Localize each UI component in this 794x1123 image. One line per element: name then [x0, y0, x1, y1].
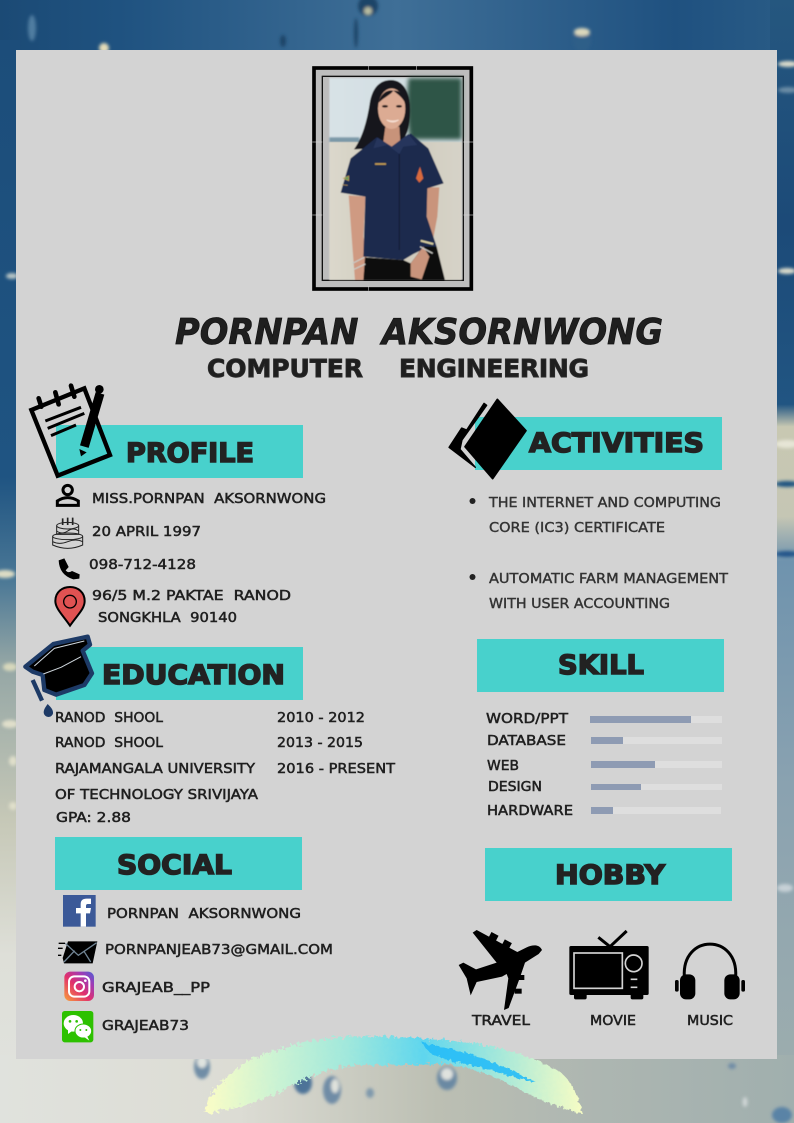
- facebook text: PORNPAN AKSORNWONG: [107, 906, 301, 922]
- education rows: OF TECHNOLOGY SRIVIJAYA: [55, 787, 259, 803]
- panel: social: [55, 837, 333, 1042]
- activity 2: [470, 571, 729, 612]
- panel: education: [25, 637, 396, 826]
- icon: airplane: [459, 930, 542, 1010]
- decoration: brush stroke: [205, 1037, 582, 1113]
- name text: MISS.PORNPAN AKSORNWONG: [92, 491, 326, 507]
- education heading bar: [56, 647, 303, 700]
- activity 1: [470, 495, 721, 536]
- education rows: 2016 - PRESENT: [277, 761, 396, 777]
- skill: word/ppt: WORD/PPT: [486, 711, 569, 727]
- skill: web: WEB: [487, 758, 519, 774]
- skill: word/ppt: [486, 711, 722, 727]
- icon: folder: [449, 399, 526, 479]
- address text: SONGKHLA 90140: [98, 610, 237, 626]
- icon: notepad and pencil: [31, 385, 110, 476]
- icon: map pin: [55, 587, 85, 626]
- subtitle: major: ENGINEERING: [399, 354, 589, 383]
- icon: phone: [59, 558, 80, 579]
- panel: hobby: [459, 848, 745, 1029]
- activities heading bar: [475, 417, 722, 470]
- address text: [92, 588, 291, 626]
- title: name: PORNPAN AKSORNWONG: [175, 312, 663, 353]
- icon: headphones: [675, 944, 745, 999]
- social heading bar: [55, 837, 302, 890]
- email text: PORNPANJEAB73@GMAIL.COM: [105, 942, 333, 958]
- skill: web: [487, 758, 722, 774]
- panel: profile: [31, 385, 326, 626]
- education rows: 2013 - 2015: [277, 735, 363, 751]
- icon: person: [57, 485, 78, 505]
- icon: wechat: [62, 1011, 93, 1042]
- skill: database: [487, 733, 722, 749]
- music label: MUSIC: [687, 1013, 733, 1029]
- icon: fast mail: [58, 941, 97, 963]
- education heading: EDUCATION: [102, 660, 285, 691]
- phone text: 098-712-4128: [89, 557, 196, 573]
- skill: database: DATABASE: [487, 733, 566, 749]
- subtitle: major: [207, 354, 589, 383]
- instagram text: GRAJEAB__PP: [102, 980, 210, 996]
- activity 1: THE INTERNET AND COMPUTING: [488, 495, 721, 511]
- education rows: RANOD SHOOL: [55, 710, 163, 726]
- activities heading: ACTIVITIES: [529, 428, 704, 459]
- movie label: MOVIE: [590, 1013, 636, 1029]
- icon: graduation cap: [25, 637, 92, 717]
- skill: design: DESIGN: [488, 779, 542, 795]
- panel: activities: [449, 399, 729, 612]
- education rows: [55, 710, 396, 826]
- icon: facebook: [63, 895, 96, 927]
- education rows: 2010 - 2012: [277, 710, 365, 726]
- skill heading: SKILL: [558, 650, 644, 681]
- profile heading bar: [56, 425, 303, 478]
- education rows: RANOD SHOOL: [55, 735, 163, 751]
- education rows: GPA: 2.88: [56, 810, 131, 826]
- address text: 96/5 M.2 PAKTAE RANOD: [92, 588, 291, 604]
- activity 2: WITH USER ACCOUNTING: [489, 596, 670, 612]
- skill: hardware: [487, 803, 721, 819]
- activity 2: AUTOMATIC FARM MANAGEMENT: [489, 571, 729, 587]
- icon: instagram: [64, 972, 94, 1001]
- travel label: TRAVEL: [471, 1013, 531, 1029]
- social heading: SOCIAL: [117, 850, 232, 881]
- birthday text: 20 APRIL 1997: [92, 524, 201, 540]
- skill: design: [488, 779, 722, 795]
- profile heading: PROFILE: [126, 438, 254, 469]
- hobby heading bar: [485, 848, 732, 901]
- photo: framed portrait: [312, 66, 473, 291]
- activity 1: CORE (IC3) CERTIFICATE: [489, 520, 665, 536]
- icon: television: [569, 931, 649, 999]
- icon: birthday cake: [53, 518, 83, 548]
- wechat text: GRAJEAB73: [102, 1018, 189, 1034]
- subtitle: major: COMPUTER: [207, 354, 363, 383]
- education rows: RAJAMANGALA UNIVERSITY: [55, 761, 256, 777]
- panel: skill: [477, 639, 724, 819]
- skill heading bar: [477, 639, 724, 692]
- hobby heading: HOBBY: [555, 860, 665, 891]
- skill: hardware: HARDWARE: [487, 803, 573, 819]
